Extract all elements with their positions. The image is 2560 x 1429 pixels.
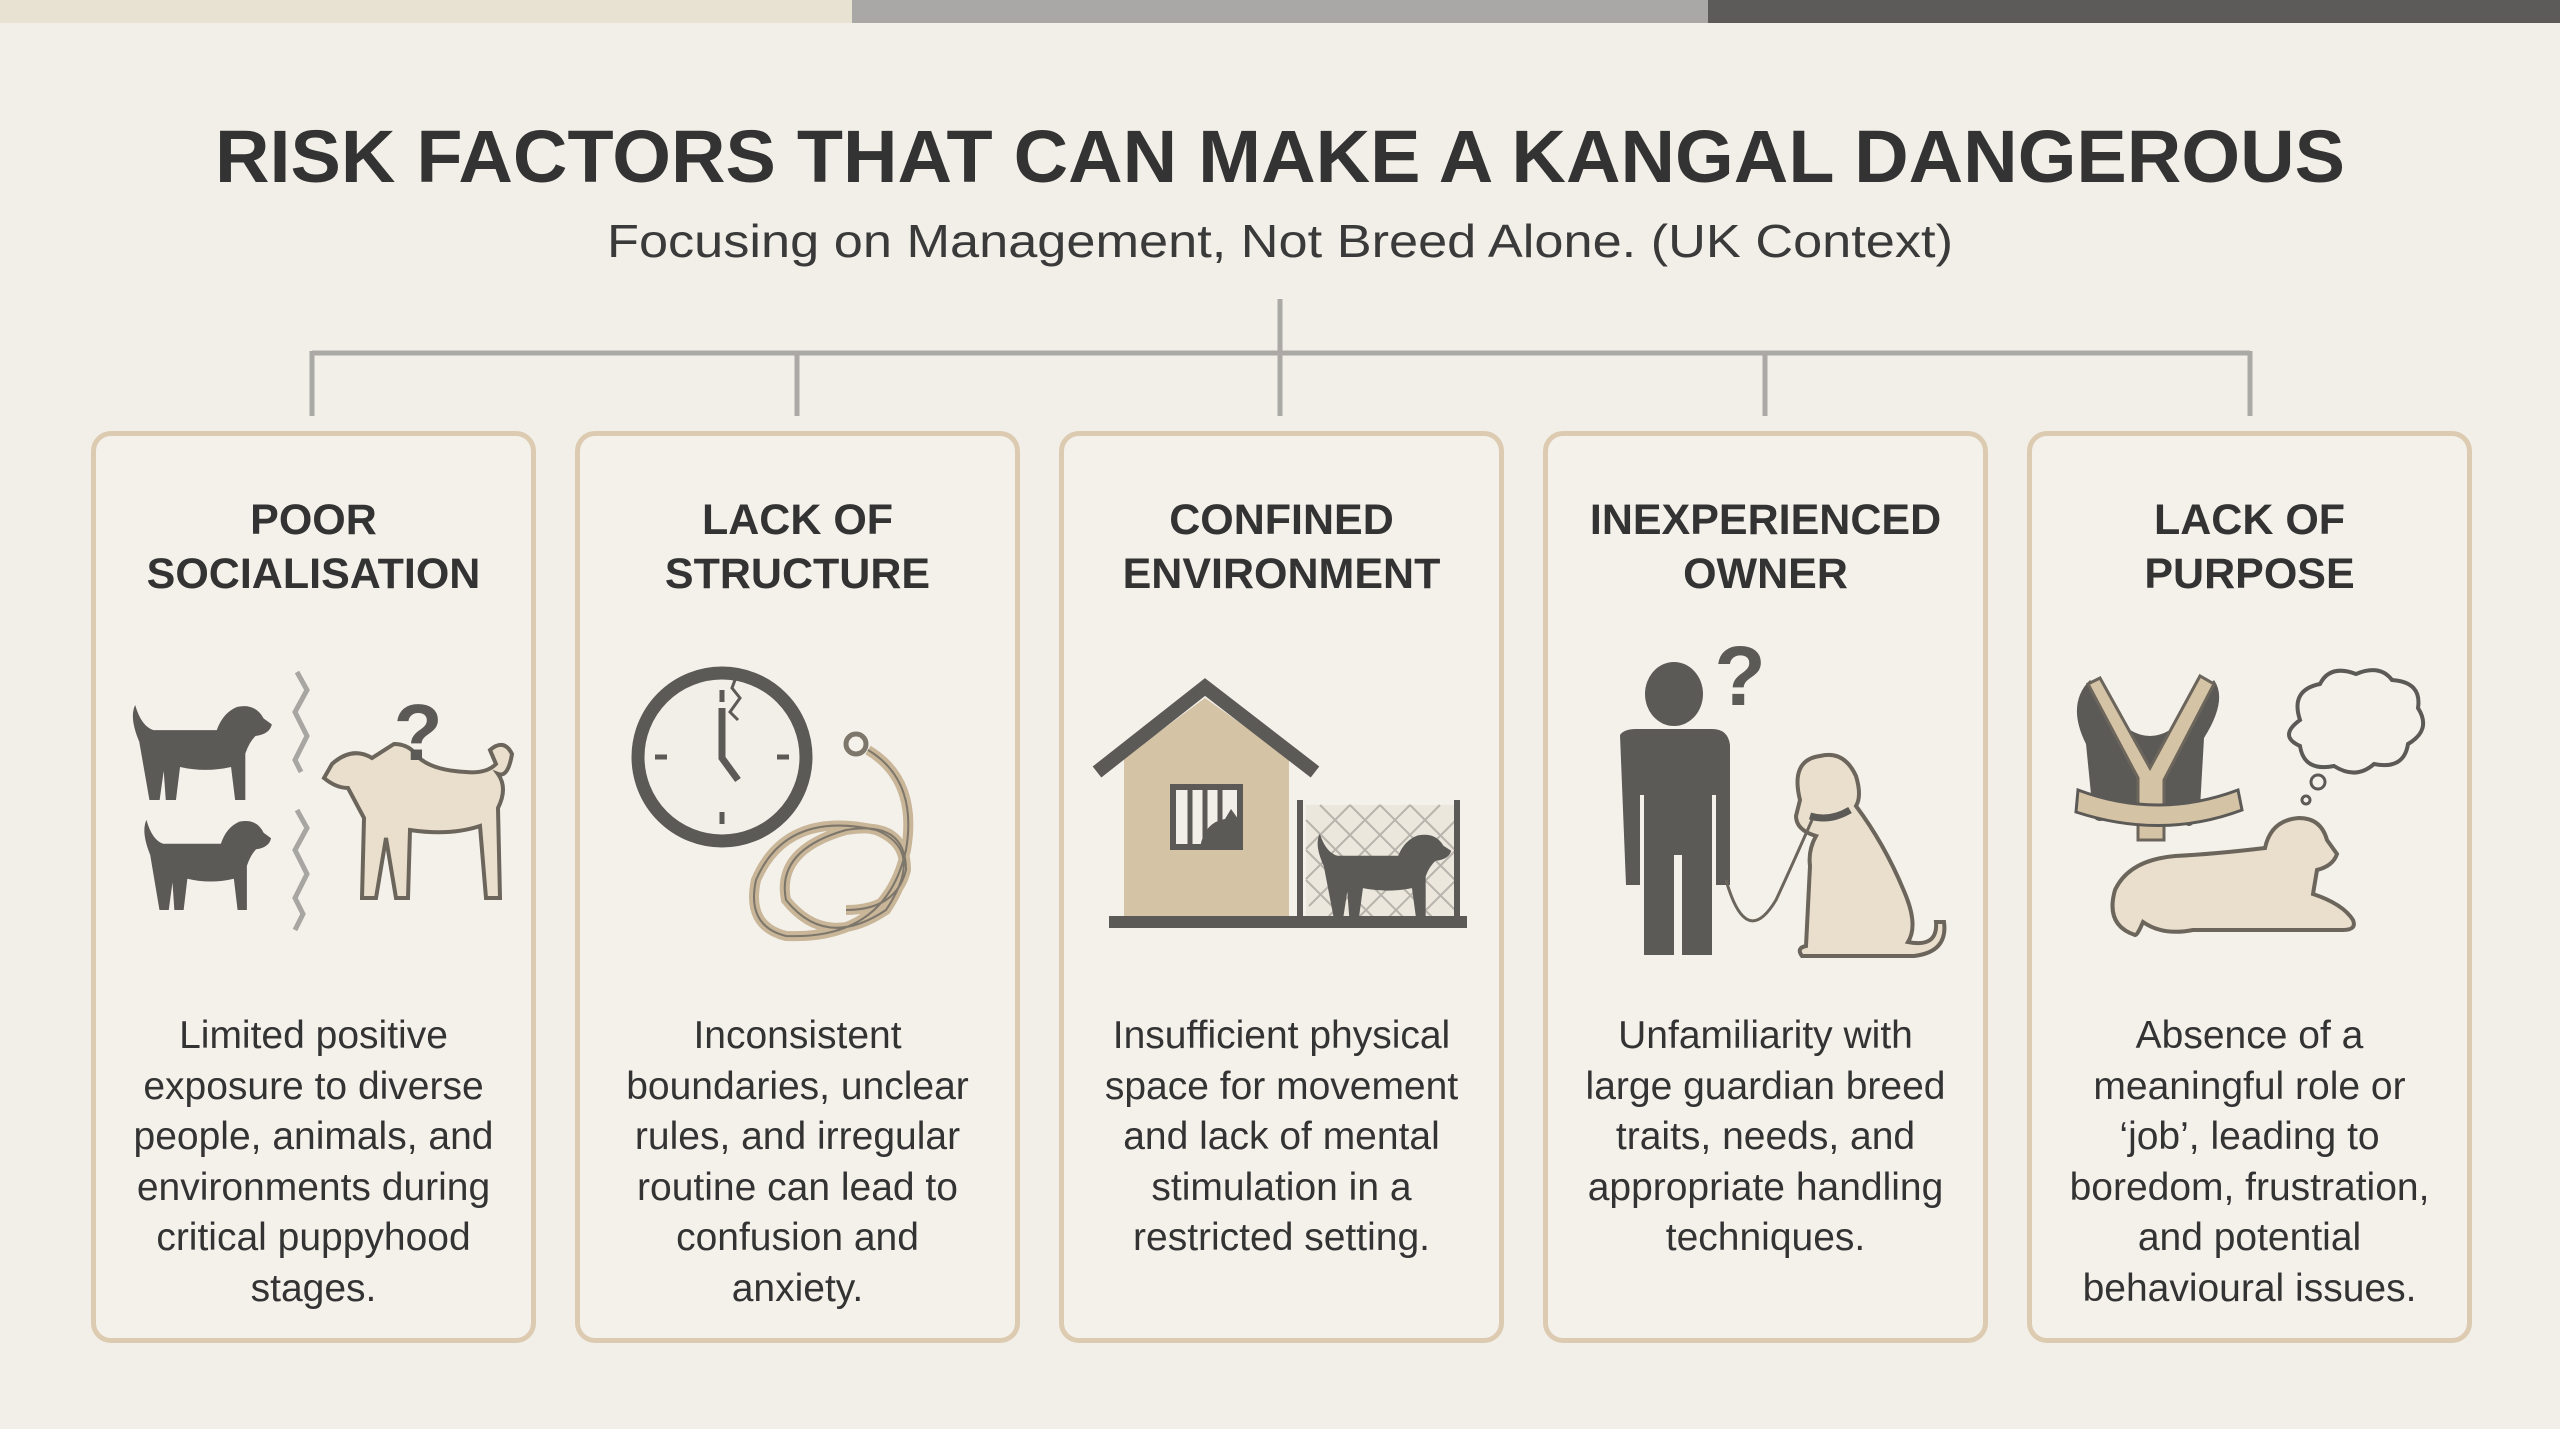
panel: lack of structure: Inconsistent (693, 1014, 902, 1057)
panel: inexperienced owner: OWNER (1683, 550, 1848, 598)
panel: poor socialisation: critical puppyhood (156, 1216, 471, 1259)
icon: broken clock and tangled leash (638, 672, 908, 936)
panel: lack of purpose: PURPOSE (2144, 550, 2355, 598)
icon: confused owner with dog: ? (1714, 629, 1766, 723)
panel: confined environment: ENVIRONMENT (1123, 550, 1440, 598)
title (215, 115, 2345, 267)
panel: inexperienced owner: appropriate handling (1588, 1166, 1943, 1209)
connector tree (310, 299, 2252, 416)
icon: dogs and question (133, 672, 512, 930)
panel: lack of structure: boundaries, unclear (626, 1065, 969, 1108)
panel: lack of purpose: meaningful role or (2093, 1065, 2406, 1108)
panel: lack of structure: rules, and irregular (635, 1115, 960, 1158)
panel: poor socialisation: people, animals, and (134, 1115, 493, 1158)
panel: lack of structure: STRUCTURE (665, 550, 930, 598)
panel: confined environment: stimulation in a (1151, 1166, 1412, 1209)
panel: lack of purpose: and potential (2138, 1216, 2361, 1259)
panel: poor socialisation: exposure to diverse (143, 1065, 484, 1108)
icon: dogs and question: ? (394, 688, 442, 777)
panel: lack of purpose (2027, 431, 2472, 1343)
icon: house and fenced dog (1097, 687, 1467, 928)
panel: inexperienced owner (1543, 431, 1988, 1343)
panel: confined environment: and lack of mental (1123, 1115, 1440, 1158)
title: RISK FACTORS THAT CAN MAKE A KANGAL DANGEROUS (215, 115, 2345, 198)
panel: lack of structure: confusion and (676, 1216, 919, 1259)
panel: confined environment: Insufficient physical (1113, 1014, 1450, 1057)
panel: confined environment: CONFINED (1169, 496, 1394, 544)
panel: lack of purpose: Absence of a (2136, 1014, 2363, 1057)
panel: inexperienced owner: INEXPERIENCED (1590, 496, 1941, 544)
panel: poor socialisation: POOR (250, 496, 377, 544)
panel: lack of structure: LACK OF (702, 496, 893, 544)
panel: inexperienced owner: large guardian breed (1586, 1065, 1945, 1108)
panel: lack of purpose: LACK OF (2154, 496, 2345, 544)
panel: inexperienced owner: techniques. (1666, 1216, 1865, 1259)
panel: confined environment (1059, 431, 1504, 1343)
panel: poor socialisation: SOCIALISATION (147, 550, 480, 598)
panel: lack of purpose: boredom, frustration, (2070, 1166, 2429, 1209)
panel: inexperienced owner: traits, needs, and (1616, 1115, 1915, 1158)
panel: confined environment: restricted setting. (1133, 1216, 1430, 1259)
panel: lack of purpose: behavioural issues. (2083, 1267, 2416, 1310)
panel: poor socialisation: environments during (137, 1166, 490, 1209)
panel: poor socialisation (91, 431, 536, 1343)
icon: confused owner with dog (1620, 629, 1944, 956)
panel: poor socialisation: Limited positive (179, 1014, 448, 1057)
title: Focusing on Management, Not Breed Alone. (UK Context) (607, 215, 1953, 267)
panel: lack of purpose: ‘job’, leading to (2119, 1115, 2380, 1158)
icon: harness, thought cloud, lying dog (2076, 670, 2423, 935)
panel: confined environment: space for movement (1105, 1065, 1458, 1108)
panel: poor socialisation: stages. (251, 1267, 376, 1310)
panel: lack of structure (575, 431, 1020, 1343)
panel: lack of structure: routine can lead to (637, 1166, 958, 1209)
top colour bar (0, 0, 2560, 23)
panel: inexperienced owner: Unfamiliarity with (1618, 1014, 1913, 1057)
panel: lack of structure: anxiety. (732, 1267, 863, 1310)
